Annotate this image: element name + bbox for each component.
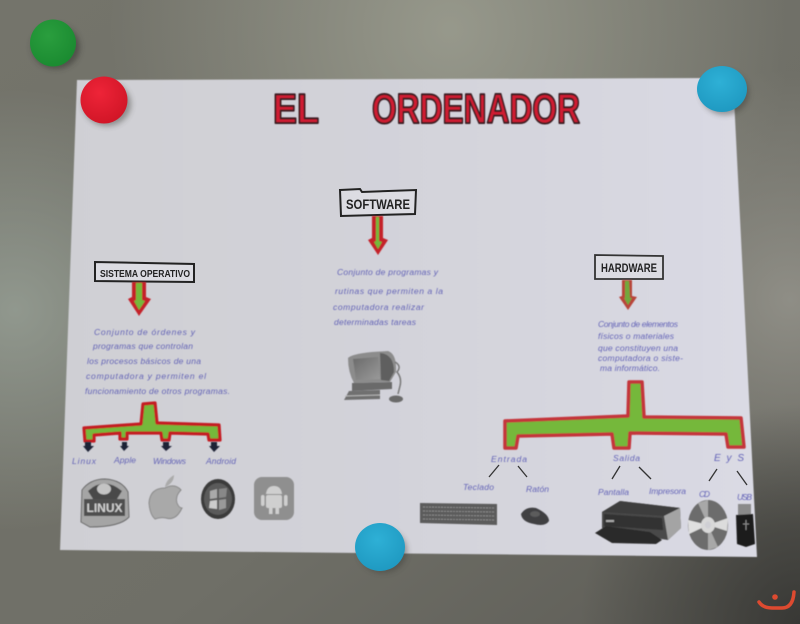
text: hardware definition: que constituyen una: [598, 343, 678, 353]
heading: software: SOFTWARE: [346, 196, 410, 212]
category labels: E y S: [714, 453, 744, 464]
heading: hardware: HARDWARE: [601, 261, 657, 275]
icon: keyboard: [420, 503, 497, 525]
arrow: software: [368, 216, 388, 255]
text: software definition: [333, 267, 443, 327]
icon: desktop computer: [344, 351, 403, 402]
panel: software: [333, 189, 443, 402]
icon: windows: [201, 479, 235, 519]
device labels: Teclado: [463, 482, 494, 492]
text: hardware definition: computadora o siste-: [598, 353, 683, 363]
category labels: Entrada: [491, 454, 527, 464]
connector lines: [489, 465, 747, 485]
text: software definition: rutinas que permiten a la: [335, 286, 443, 296]
icon: linux: [81, 479, 129, 527]
magnet: red: [80, 76, 131, 126]
labels: operating systems: Apple: [113, 455, 136, 465]
heading: sistema operativo: [95, 262, 194, 282]
title: [273, 85, 580, 132]
title: EL: [273, 85, 319, 132]
text: software definition: determinadas tareas: [334, 317, 417, 327]
text: software definition: Conjunto de programas y: [337, 267, 439, 277]
arrow: sistema operativo: [128, 282, 151, 316]
panel: hardware: [420, 255, 755, 550]
icon: mouse: [521, 508, 549, 525]
category labels: Salida: [613, 453, 640, 463]
text: sistema operativo definition: los procesos básicos de una: [87, 356, 201, 366]
icon: printer: [595, 501, 681, 544]
heading: hardware: [595, 255, 663, 279]
text: hardware definition: físicos o materiales: [598, 331, 675, 341]
magnet: green: [30, 20, 80, 69]
icon: apple: [149, 475, 182, 519]
labels: operating systems: Android: [205, 456, 236, 466]
device labels: Pantalla: [598, 487, 629, 497]
device labels: Ratón: [526, 484, 549, 494]
text: hardware definition: [598, 319, 683, 373]
heading: software: [340, 189, 416, 216]
text: sistema operativo definition: funcionamiento de otros programas.: [85, 386, 230, 396]
text: software definition: computadora realizar: [333, 302, 425, 312]
icon: linux: LINUX: [86, 501, 122, 515]
labels: operating systems: Linux: [72, 456, 97, 466]
bracket: hardware branches: [505, 382, 744, 448]
labels: operating systems: [72, 455, 236, 466]
panel: sistema operativo: [72, 262, 294, 527]
arrows: four small navy arrowheads: [83, 442, 220, 452]
labels: operating systems: Windows: [153, 456, 187, 466]
text: sistema operativo definition: computadora y permiten el: [86, 371, 207, 381]
magnet: blue bottom: [355, 523, 407, 573]
icon: usb stick: [736, 504, 755, 547]
text: hardware definition: ma informático.: [600, 363, 660, 373]
text: hardware definition: Conjunto de elementos: [598, 319, 679, 329]
text: sistema operativo definition: Conjunto de órdenes y: [94, 327, 196, 337]
device labels: [463, 482, 752, 502]
device labels: Impresora: [649, 486, 686, 496]
paper sheet: [60, 78, 757, 557]
category labels: [491, 453, 744, 464]
device labels: CD: [699, 489, 710, 499]
icon: cd: [688, 500, 728, 550]
device labels: USB: [737, 492, 752, 502]
arrow: hardware: [619, 280, 637, 310]
icon: android: [254, 477, 294, 520]
bracket: sistema operativo branches: [84, 403, 220, 441]
title: ORDENADOR: [372, 85, 580, 132]
text: sistema operativo definition: [85, 327, 230, 396]
watermark smile: [759, 592, 794, 608]
text: sistema operativo definition: programas que controlan: [92, 341, 193, 351]
magnet: blue top right: [697, 66, 749, 115]
heading: sistema operativo: SISTEMA OPERATIVO: [100, 269, 190, 280]
